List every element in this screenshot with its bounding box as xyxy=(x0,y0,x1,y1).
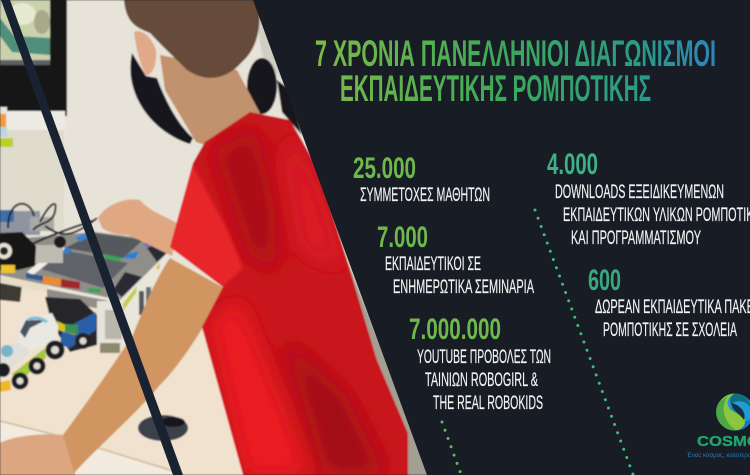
robot cars on table xyxy=(0,297,97,392)
stat: 600 packages xyxy=(588,264,750,341)
dotted line: left xyxy=(442,422,462,475)
student: neck xyxy=(160,55,260,145)
photo: student building robots xyxy=(0,0,430,475)
stat: 7.000.000 views: 7.000.000 xyxy=(409,313,501,346)
dark background panel xyxy=(253,0,750,475)
stat: 7.000 teachers: ΕΚΠΑΙΔΕΥΤΙΚΟΙ ΣΕ xyxy=(385,254,481,275)
title xyxy=(315,33,716,109)
wired robot on shelf xyxy=(0,204,97,273)
grommet hole xyxy=(138,415,188,441)
stat: 4.000 downloads xyxy=(547,148,750,249)
stat: 600 packages: 600 xyxy=(588,264,621,297)
stat: 7.000.000 views: ΤΑΙΝΙΩΝ ROBOGIRL & xyxy=(425,370,538,391)
diagonal stripe xyxy=(1,0,183,475)
stat: 25.000 participations xyxy=(353,152,490,206)
stat: 7.000.000 views: THE REAL ROBOKIDS xyxy=(433,393,543,414)
window with greenery xyxy=(0,0,67,116)
toy on sill xyxy=(0,107,13,147)
gray strip next to the shirt xyxy=(347,260,430,475)
stat: 4.000 downloads: 4.000 xyxy=(547,148,598,181)
student: red t-shirt xyxy=(169,111,409,475)
dotted line: right xyxy=(535,210,634,475)
bright folds low left xyxy=(210,300,310,475)
window sill and lower wall xyxy=(0,111,65,135)
student: ear xyxy=(134,31,156,75)
student: black face mask xyxy=(130,53,193,144)
stat: 7.000.000 views xyxy=(409,313,551,414)
icon: logo swirl xyxy=(716,394,750,431)
stat: 25.000 participations: 25.000 xyxy=(353,152,416,185)
student: hair xyxy=(124,0,259,78)
stat: 7.000 teachers: ΕΝΗΜΕΡΩΤΙΚΑ ΣΕΜΙΝΑΡΙΑ xyxy=(393,277,534,298)
sunlit sleeve xyxy=(165,160,243,287)
student: hand on keyboard and forearm xyxy=(98,199,180,256)
black ball behind the student xyxy=(247,58,277,114)
lighter back xyxy=(285,130,345,270)
dark upper shade xyxy=(215,130,275,270)
stat: 7.000 teachers: 7.000 xyxy=(377,221,428,254)
lego shelf xyxy=(0,232,170,353)
dark lower shade xyxy=(285,340,385,475)
logo: Cosmote xyxy=(686,394,750,459)
table top xyxy=(0,285,290,475)
stat: 7.000 teachers xyxy=(377,221,534,298)
stat: 25.000 participations: ΣΥΜΜΕΤΟΧΕΣ ΜΑΘΗΤΩΝ xyxy=(360,185,490,206)
under-shelf shadow xyxy=(0,280,22,302)
student: arm and hand on table xyxy=(0,258,224,475)
stat: 7.000.000 views: YOUTUBE ΠΡΟΒΟΛΕΣ ΤΩΝ xyxy=(417,347,551,368)
